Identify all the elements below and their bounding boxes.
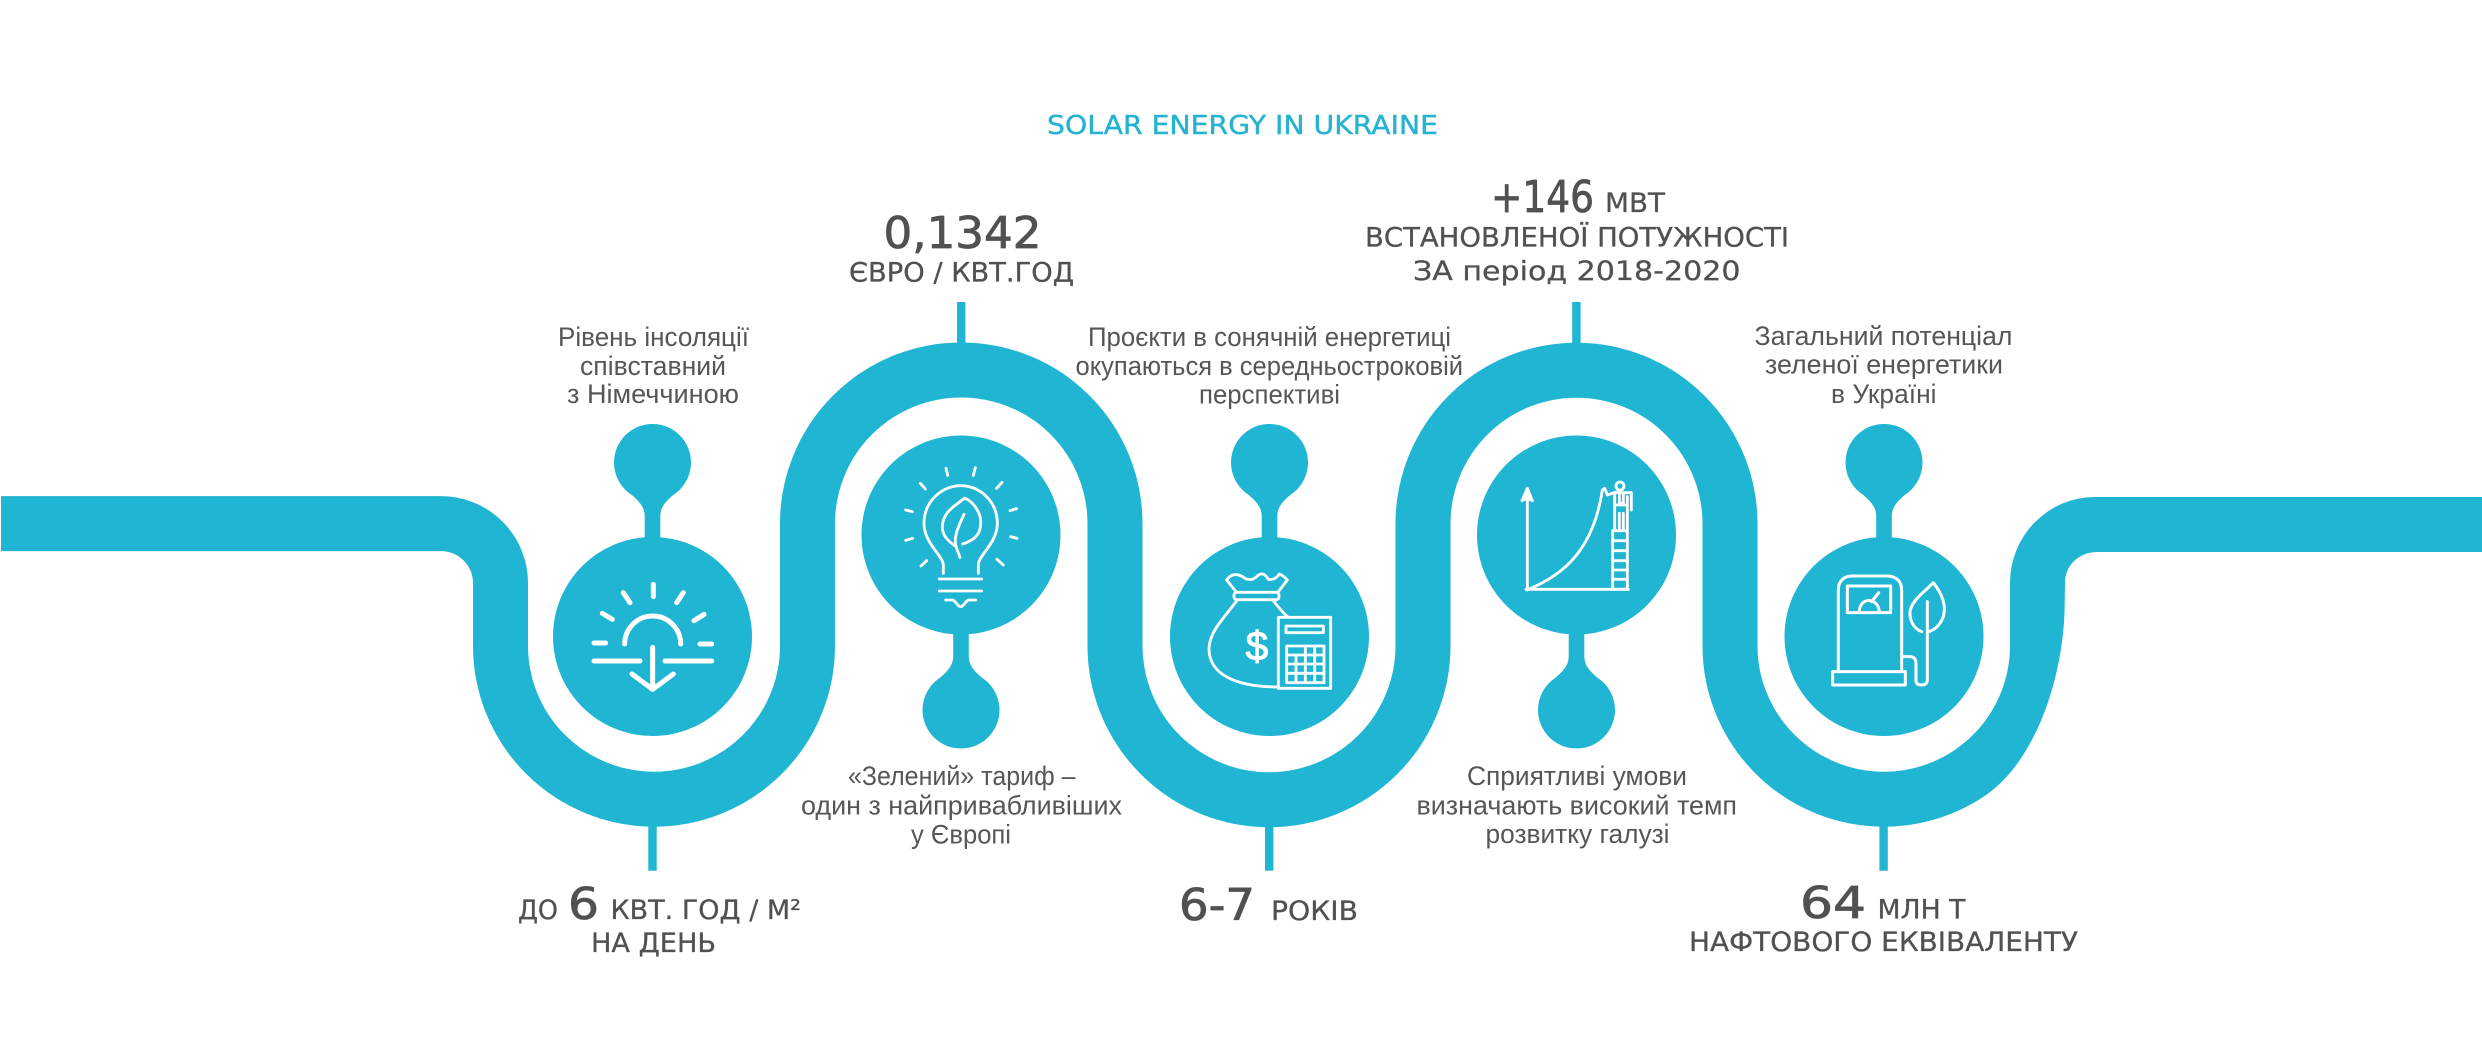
lollipop connector 2: [922, 632, 1000, 748]
text: insolation note: [558, 322, 749, 409]
stat: 64 million tonnes oil equivalent: [1689, 878, 2078, 958]
text: green tariff note: у Європі: [911, 820, 1011, 850]
lollipop connector 4: [1538, 632, 1615, 748]
serpentine band: [1, 370, 2482, 827]
text: green energy potential note: Загальний потенціал: [1754, 321, 2012, 351]
stat: tariff 0.1342 euro: [849, 208, 1074, 288]
stat: +146 MW installed: МВТ: [1605, 188, 1666, 219]
stem: bottom 1: [648, 820, 657, 871]
text: insolation note: з Німеччиною: [567, 379, 739, 409]
stat: +146 MW installed: [1365, 172, 1789, 287]
circle 2: [862, 436, 1060, 634]
text: green tariff note: «Зелений» тариф –: [848, 761, 1076, 791]
lollipop connector 5: [1846, 424, 1922, 540]
circle 5: [1784, 537, 1984, 736]
text: payback note: [1076, 322, 1463, 410]
stat: up to 6 kWh per m2 per day: КВТ. ГОД / М²: [610, 895, 801, 926]
lollipop connector 1: [614, 424, 691, 540]
lollipop connector 3: [1231, 424, 1308, 540]
stat: +146 MW installed: ВСТАНОВЛЕНОЇ ПОТУЖНОСТІ: [1365, 222, 1789, 254]
text: payback note: перспективі: [1199, 380, 1340, 410]
icon: sun with down arrow: [594, 584, 712, 689]
stat: tariff 0.1342 euro: 0,1342: [884, 208, 1042, 259]
stat: 64 million tonnes oil equivalent: 64: [1800, 878, 1866, 929]
text: insolation note: співставний: [580, 351, 726, 381]
stem: bottom 5: [1879, 820, 1888, 871]
stat: up to 6 kWh per m2 per day: 6: [568, 879, 599, 930]
icon: light bulb with leaf: [906, 468, 1017, 607]
icon: money bag and calculator: [1209, 574, 1331, 688]
text: green energy potential note: зеленої енергетики: [1765, 350, 2003, 380]
text: favourable conditions note: розвитку галузі: [1486, 819, 1670, 849]
stat: up to 6 kWh per m2 per day: НА ДЕНЬ: [591, 928, 716, 959]
stat: 6-7 years: 6-7: [1179, 880, 1255, 931]
circle 4: [1477, 436, 1676, 634]
text: favourable conditions note: визначають високий темп: [1416, 790, 1737, 820]
stat: 64 million tonnes oil equivalent: НАФТОВОГО ЕКВІВАЛЕНТУ: [1689, 927, 2078, 958]
stat: 6-7 years: РОКІВ: [1271, 896, 1358, 927]
text: green tariff note: один з найпривабливіших: [801, 790, 1122, 820]
stat: up to 6 kWh per m2 per day: [518, 879, 801, 959]
stem: top 4: [1572, 302, 1581, 348]
icon: money bag and calculator: $: [1246, 623, 1268, 669]
stat: up to 6 kWh per m2 per day: ДО: [518, 895, 558, 926]
text: payback note: Проєкти в сонячній енергетиці: [1088, 322, 1451, 352]
stat: tariff 0.1342 euro: ЄВРО / КВТ.ГОД: [849, 258, 1074, 288]
stat: +146 MW installed: +146: [1491, 172, 1594, 223]
icon: growth chart with person on ladder: [1522, 482, 1631, 590]
stat: 64 million tonnes oil equivalent: МЛН Т: [1878, 894, 1966, 926]
text: insolation note: Рівень інсоляції: [558, 322, 749, 352]
text: favourable conditions note: [1416, 761, 1737, 849]
stem: bottom 3: [1265, 820, 1273, 871]
text: payback note: окупаються в середньостроковій: [1076, 351, 1463, 381]
stat: +146 MW installed: ЗА період 2018-2020: [1413, 256, 1740, 287]
stat: 6-7 years: [1179, 880, 1358, 931]
text: green energy potential note: [1754, 321, 2012, 409]
title: SOLAR ENERGY IN UKRAINE: [1047, 111, 1438, 141]
icon: fuel pump with leaf: [1833, 576, 1944, 685]
text: green tariff note: [801, 761, 1122, 850]
stem: top 2: [957, 302, 965, 348]
text: favourable conditions note: Сприятливі умови: [1467, 761, 1687, 791]
circle 1: [553, 537, 752, 736]
circle 3: [1170, 537, 1369, 736]
text: green energy potential note: в Україні: [1831, 379, 1936, 409]
